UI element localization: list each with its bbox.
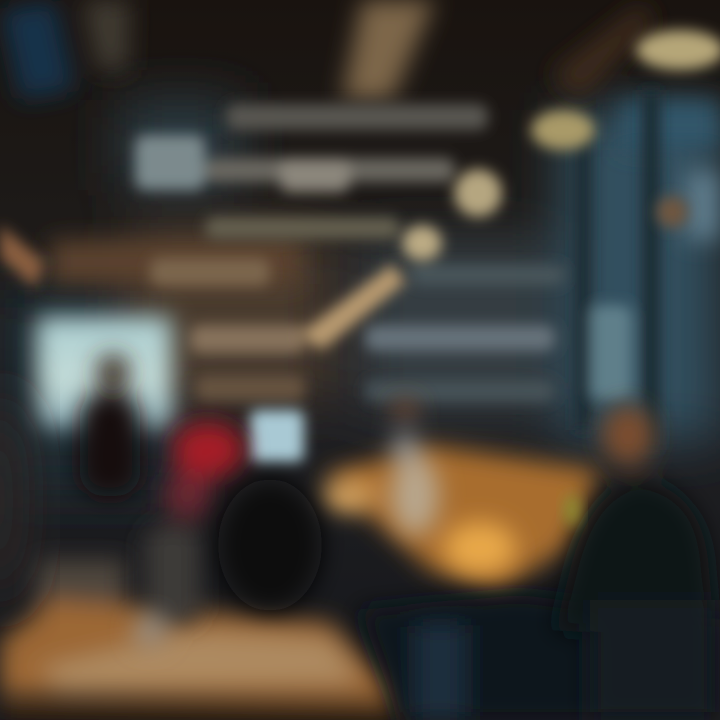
- beam at left edge: [0, 225, 45, 288]
- bright window at left: [36, 316, 172, 428]
- ceiling lamps: [402, 30, 720, 261]
- dark chair on left edge: [0, 390, 30, 610]
- laptop screen glow: [250, 410, 304, 462]
- person standing by window: [80, 354, 140, 496]
- diagonal light beam: [298, 264, 406, 350]
- table light pools: [322, 398, 516, 574]
- shelf rows of pale bars: [135, 90, 660, 450]
- foreground floor shadow: [360, 595, 720, 720]
- background: window wall on the right: [0, 100, 720, 490]
- ceiling beams: [0, 0, 720, 284]
- dark seated figure in the middle: [218, 479, 322, 611]
- foreground person from behind: [555, 405, 715, 720]
- person in red: [133, 422, 244, 647]
- central wooden table: [325, 445, 600, 590]
- left tabletop: [0, 560, 400, 720]
- green-yellow accent on table: [564, 494, 580, 526]
